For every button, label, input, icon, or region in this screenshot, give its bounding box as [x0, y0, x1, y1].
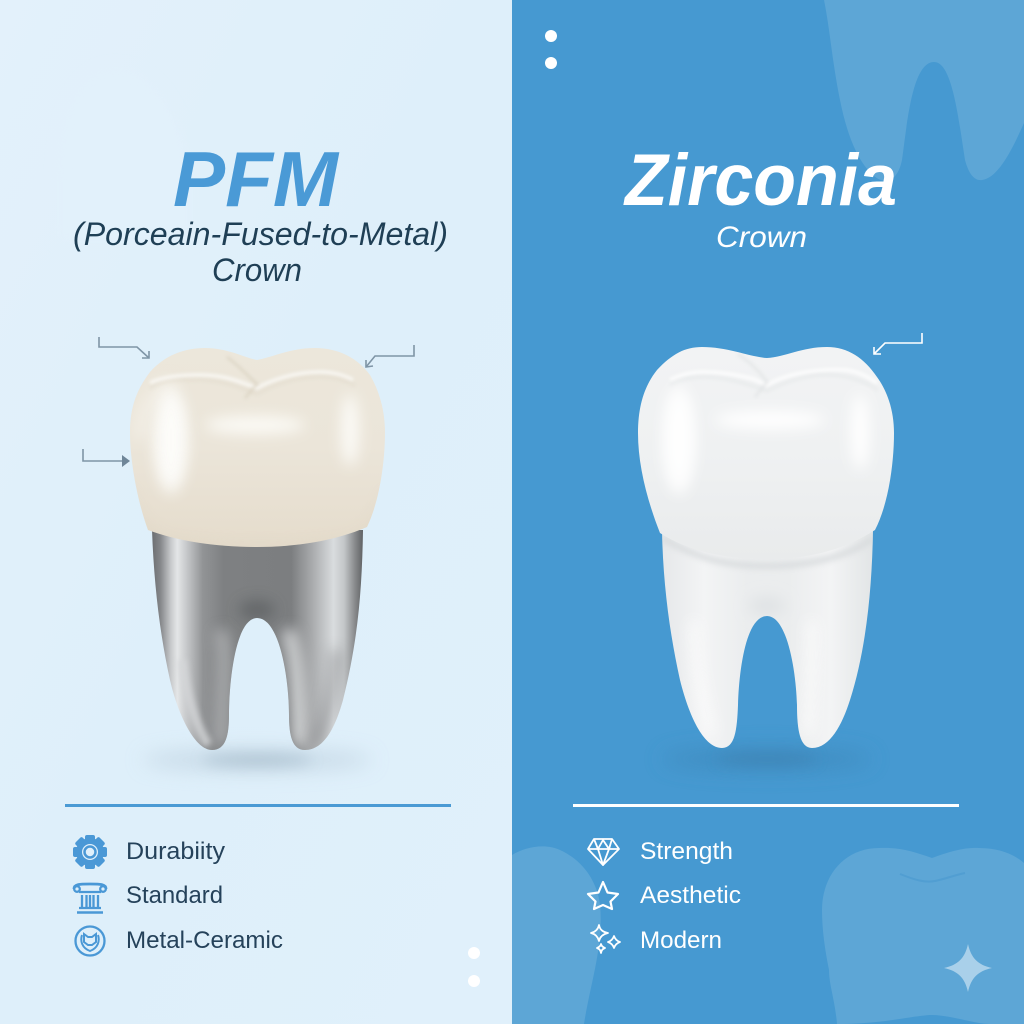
icon: metal-ceramic circle — [76, 926, 104, 956]
shadow: Zirconia tooth — [662, 747, 872, 771]
label: Strength: Strength — [640, 838, 733, 865]
decoration: dots bottom left panel — [468, 947, 480, 987]
root — [662, 530, 873, 748]
arrow: PFM top right — [366, 345, 414, 367]
subtitle: Crown left: Crown — [212, 252, 302, 288]
metal root — [152, 530, 363, 750]
panel: Zirconia background — [512, 0, 1024, 1024]
label: Standard: Standard — [126, 882, 223, 909]
icon: sparkles — [591, 925, 620, 953]
panel: PFM background — [0, 0, 512, 1024]
decoration: sparkle — [944, 944, 992, 992]
title: Zirconia: Zirconia — [623, 140, 897, 221]
arrow: Zirconia — [874, 333, 922, 354]
crown — [638, 347, 894, 559]
icon: diamond — [588, 839, 619, 865]
porcelain crown — [130, 348, 385, 560]
icon: column — [74, 884, 106, 912]
label: Durability: Durabiity — [126, 838, 225, 865]
icon: gear — [73, 835, 107, 869]
label: Aesthetic: Aesthetic — [640, 882, 741, 909]
label: Metal-Ceramic: Metal-Ceramic — [126, 927, 283, 954]
arrow: PFM left — [83, 449, 130, 467]
shadow: PFM tooth — [142, 749, 372, 771]
label: Modern: Modern — [640, 927, 722, 954]
illustration: Zirconia tooth — [638, 347, 894, 748]
subtitle: Crown right: Crown — [716, 221, 807, 254]
subtitle: Porcelain-Fused-to-Metal: (Porceain-Fused-to-Metal) — [73, 216, 448, 252]
divider: left — [65, 804, 451, 807]
arrow: PFM top left — [99, 337, 149, 358]
title: PFM: PFM — [173, 135, 340, 223]
divider: right — [573, 804, 959, 807]
icon: star — [588, 882, 618, 909]
illustration: PFM tooth — [130, 348, 385, 750]
decoration: dots top right panel — [545, 30, 557, 69]
